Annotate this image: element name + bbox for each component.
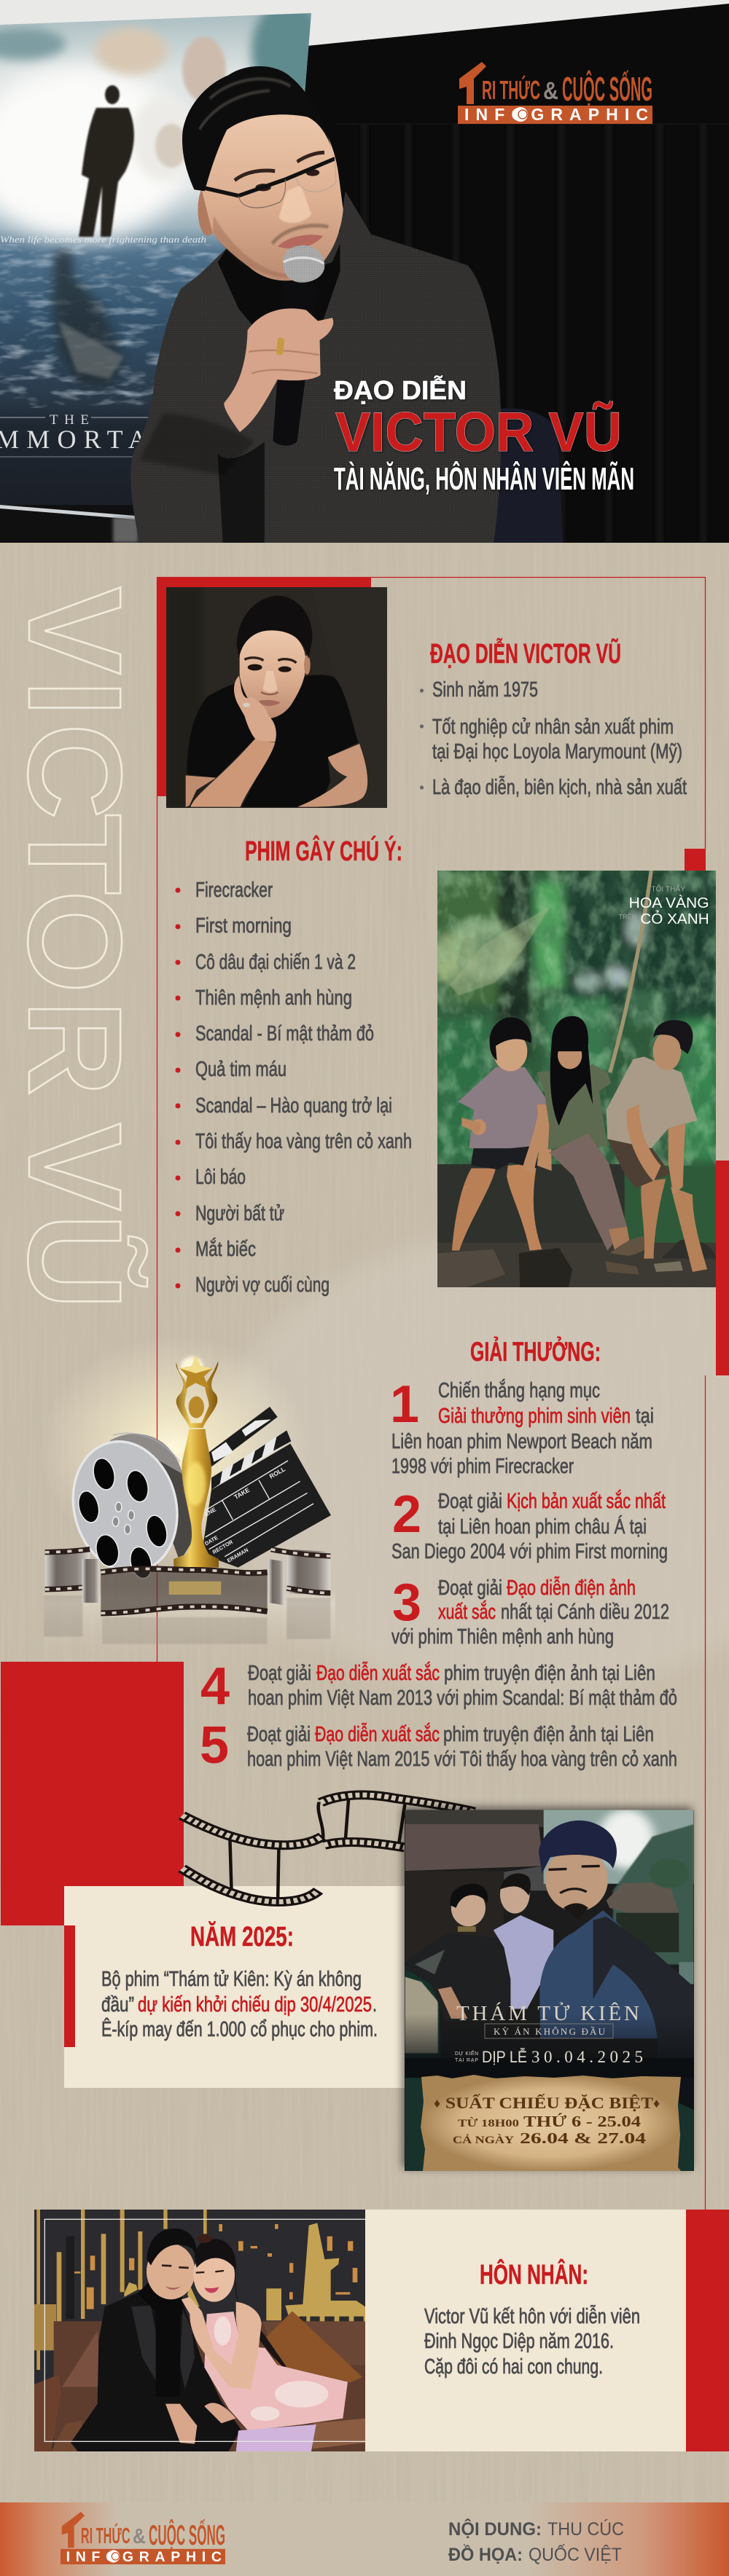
- clapperboard: RECTOR: [211, 1539, 235, 1555]
- leaf texture: [437, 871, 716, 1166]
- arms: [190, 739, 275, 807]
- award 4: phim truyện điện ảnh tại Liên: [444, 1662, 655, 1685]
- torn paper banner: SUẤT CHIẾU ĐẶC BIỆT: [445, 2094, 653, 2112]
- trophy statuette: [174, 1355, 219, 1568]
- boy left: [452, 1017, 549, 1251]
- poster: Thám tử Kiên: [405, 1810, 694, 2171]
- translucent film strip in front: [101, 1569, 268, 1616]
- face: [202, 110, 343, 280]
- award 1: Liên hoan phim Newport Beach năm: [391, 1430, 652, 1453]
- stone wall and ground: [437, 1164, 625, 1251]
- hair: [237, 596, 312, 659]
- footer logo: INFOGRAPHIC: [66, 2549, 222, 2565]
- film poster in the background: [0, 0, 324, 523]
- gold tower and ship: [124, 2223, 365, 2322]
- wedding ring: [276, 337, 284, 356]
- portrait photo: [166, 587, 387, 808]
- vertical outlined name: VICTOR VŨ: [1, 586, 149, 1309]
- microphone: [273, 246, 324, 446]
- films titles: Tôi thấy hoa vàng trên cỏ xanh: [195, 1130, 412, 1153]
- clapperboard: ROLL: [268, 1465, 287, 1480]
- torn paper banner: THỨ 6 - 25.04: [523, 2113, 642, 2130]
- award 2: Đoạt giải: [438, 1490, 502, 1513]
- films titles: Scandal – Hào quang trở lại: [195, 1094, 392, 1118]
- 2025 body text: [101, 1968, 378, 2041]
- footer: CUỘC SỐNG: [149, 2518, 225, 2551]
- films heading: PHIM GÂY CHÚ Ý:: [245, 835, 402, 867]
- award 3: [391, 1574, 669, 1649]
- award 1: tại: [636, 1405, 654, 1428]
- marriage text: Victor Vũ kết hôn với diễn viên: [424, 2304, 640, 2328]
- torn paper banner: TỪ 18H00: [458, 2117, 519, 2129]
- award 1: 1998 với phim Firecracker: [391, 1455, 574, 1478]
- award 4: Đoạt giải: [248, 1662, 311, 1685]
- headline block: [334, 374, 634, 497]
- clapperboard: DATE: [203, 1534, 219, 1547]
- couple photo: [34, 2210, 370, 2451]
- red block left: [1, 1662, 184, 1925]
- film strip decoration: [182, 1795, 475, 1902]
- poster title: THE: [50, 412, 89, 428]
- clapperboard: ENE: [203, 1506, 217, 1517]
- torn paper banner: ♦: [653, 2096, 660, 2110]
- jacket: [130, 191, 501, 543]
- facial features: [235, 152, 328, 248]
- award 3: xuất sắc: [438, 1600, 496, 1624]
- films bullets: [175, 887, 181, 1288]
- clapperboard: ERAMAN: [226, 1547, 249, 1564]
- hero photo: [0, 0, 729, 543]
- poster title: THÁM TỬ KIÊN: [456, 2001, 639, 2025]
- films titles: Lôi báo: [195, 1166, 246, 1189]
- torn paper banner: ♦: [434, 2096, 440, 2110]
- award 2: tại Liên hoan phim châu Á tại: [438, 1515, 647, 1539]
- award 2: [391, 1485, 668, 1563]
- award 2: 2: [392, 1485, 421, 1544]
- award 3: Đoạt giải: [438, 1576, 502, 1600]
- man in black: [71, 2229, 241, 2451]
- films list: [175, 835, 412, 1297]
- gold pipes: [36, 2210, 207, 2370]
- footer logo: RI THỨC: [81, 2522, 130, 2548]
- films titles: Firecracker: [195, 879, 273, 902]
- trophy glow: [39, 1335, 335, 1661]
- face: [240, 629, 306, 718]
- panel: marriage: [365, 2210, 729, 2451]
- leather sofa: [54, 2321, 365, 2451]
- 2025 body text: Bộ phim “Thám tử Kiên: Kỳ án không: [101, 1968, 362, 1991]
- detective: [539, 1821, 694, 2110]
- hand under chin: [234, 676, 276, 742]
- award 5: 5: [200, 1716, 229, 1775]
- hair: [182, 66, 331, 191]
- award 3: với phim Thiên mệnh anh hùng: [391, 1625, 614, 1649]
- bio bullets: Sinh năm 1975: [432, 678, 538, 702]
- 2025 body text: đầu”: [101, 1993, 134, 2017]
- credits: [448, 2518, 624, 2565]
- awards section: [200, 1336, 677, 1775]
- award 2: Kịch bản xuất sắc nhất: [507, 1489, 666, 1513]
- poster title: TẠI RẠP: [455, 2058, 478, 2063]
- main subject: director speaking into microphone: [130, 66, 501, 543]
- clapperboard: [202, 1407, 331, 1568]
- award 1: Chiến thắng hạng mục: [438, 1378, 600, 1402]
- film title: [618, 885, 709, 927]
- logo top: [458, 62, 652, 124]
- film title: CỎ XANH: [640, 909, 709, 927]
- poster title: DỰ KIẾN: [455, 2049, 478, 2057]
- films titles: Người bất tử: [195, 1202, 284, 1225]
- brown pillow: [266, 2311, 362, 2382]
- award 3: Đạo diễn điện ảnh: [507, 1576, 636, 1600]
- woman in black: [405, 1884, 514, 2021]
- poster title: KỲ ÁN KHÔNG ĐẦU: [494, 2026, 606, 2037]
- award 1: Giải thưởng phim sinh viên: [438, 1405, 631, 1428]
- marriage text: [424, 2304, 640, 2379]
- shirt: [218, 243, 340, 330]
- logo top: INFOGRAPHIC: [464, 105, 648, 124]
- logo top: &: [543, 77, 558, 105]
- torn paper banner: 26.04 & 27.04: [520, 2129, 647, 2147]
- boy right: [607, 1020, 707, 1272]
- woman in pink dress: [182, 2234, 348, 2451]
- marriage text: Đinh Ngọc Diệp năm 2016.: [424, 2330, 614, 2353]
- footer: [0, 2502, 729, 2576]
- footer logo: [61, 2512, 225, 2565]
- bio text: [420, 637, 687, 799]
- films titles: [195, 879, 412, 1297]
- bio bullets: [420, 678, 687, 799]
- hand: [224, 308, 333, 432]
- film title: TÔI THẤY: [651, 885, 685, 894]
- film title: TRÊN: [618, 913, 636, 920]
- headline: name: VICTOR VŨ: [335, 401, 622, 463]
- poster title: [455, 2001, 643, 2066]
- logo top: RI THỨC: [482, 74, 540, 105]
- panel: 2025 cream box: [64, 1886, 407, 2088]
- award 4: Đạo diễn xuất sắc: [316, 1661, 440, 1685]
- film still: three children: [430, 871, 716, 1287]
- trophy and film reel illustration: [44, 1355, 331, 1644]
- red frame lines: [157, 577, 729, 2210]
- films titles: Quả tim máu: [195, 1058, 286, 1081]
- awards heading: GIẢI THƯỞNG:: [470, 1336, 601, 1367]
- thin white frame: [44, 2219, 370, 2441]
- award 3: 3: [392, 1574, 421, 1632]
- award 5: Đoạt giải: [247, 1723, 311, 1746]
- 2025 heading: NĂM 2025:: [190, 1920, 294, 1952]
- poster title: DỊP LỄ: [482, 2047, 527, 2066]
- 2025 body text: dự kiến khởi chiếu dịp 30/4/2025: [138, 1993, 372, 2017]
- films titles: First morning: [195, 914, 292, 938]
- chair: [494, 408, 563, 543]
- torn paper banner: CẢ NGÀY: [453, 2134, 514, 2146]
- city lights: [73, 2224, 357, 2309]
- footer logo: &: [133, 2525, 146, 2548]
- films titles: Cô dâu đại chiến 1 và 2: [195, 951, 356, 974]
- woman in lavender: [494, 1874, 553, 2009]
- film strips: [45, 1548, 330, 1605]
- ear: [198, 191, 213, 236]
- black polo shirt: [187, 675, 358, 807]
- award 5: [200, 1716, 677, 1775]
- award 1: [390, 1375, 654, 1478]
- sea texture: [0, 244, 241, 408]
- films titles: Thiên mệnh anh hùng: [195, 986, 352, 1010]
- film title: HOA VÀNG: [629, 894, 709, 911]
- poster title: 30.04.2025: [531, 2048, 643, 2066]
- credits: NỘI DUNG:: [448, 2518, 542, 2540]
- clapperboard: TAKE: [233, 1486, 251, 1501]
- award 5: Đạo diễn xuất sắc: [315, 1722, 440, 1746]
- bio heading: ĐẠO DIỄN VICTOR VŨ: [430, 637, 621, 669]
- marriage text: Cặp đôi có hai con chung.: [424, 2355, 603, 2379]
- films titles: Scandal - Bí mật thảm đỏ: [195, 1022, 374, 1045]
- award 4: 4: [200, 1657, 230, 1716]
- films titles: Mắt biếc: [195, 1237, 256, 1261]
- girl: [537, 1016, 652, 1256]
- film reel: [60, 1430, 192, 1583]
- films titles: Người vợ cuối cùng: [195, 1273, 330, 1297]
- award 5: phim truyện điện ảnh tại Liên: [443, 1723, 654, 1746]
- 2025 body text: Ê-kíp may đến 1.000 cổ phục cho phim.: [101, 2017, 378, 2041]
- award 3: nhất tại Cánh diều 2012: [501, 1601, 669, 1624]
- glasses: [205, 159, 336, 208]
- credits: THU CÚC: [547, 2518, 624, 2540]
- poster artwork: [405, 1810, 694, 2171]
- 2025 body text: .: [373, 1993, 377, 2017]
- torn paper banner: [421, 2075, 681, 2171]
- credits: ĐỒ HỌA:: [448, 2543, 523, 2565]
- poster tagline: When life becomes more frightening than death: [0, 234, 206, 245]
- award 4: [200, 1657, 677, 1716]
- marriage heading: HÔN NHÂN:: [480, 2258, 588, 2290]
- poster title: [0, 415, 149, 458]
- eyes, nose and lips: [244, 658, 296, 706]
- credits: QUỐC VIỆT: [529, 2543, 622, 2565]
- headline: director: ĐẠO DIỄN: [334, 374, 467, 405]
- award 1: 1: [390, 1375, 419, 1434]
